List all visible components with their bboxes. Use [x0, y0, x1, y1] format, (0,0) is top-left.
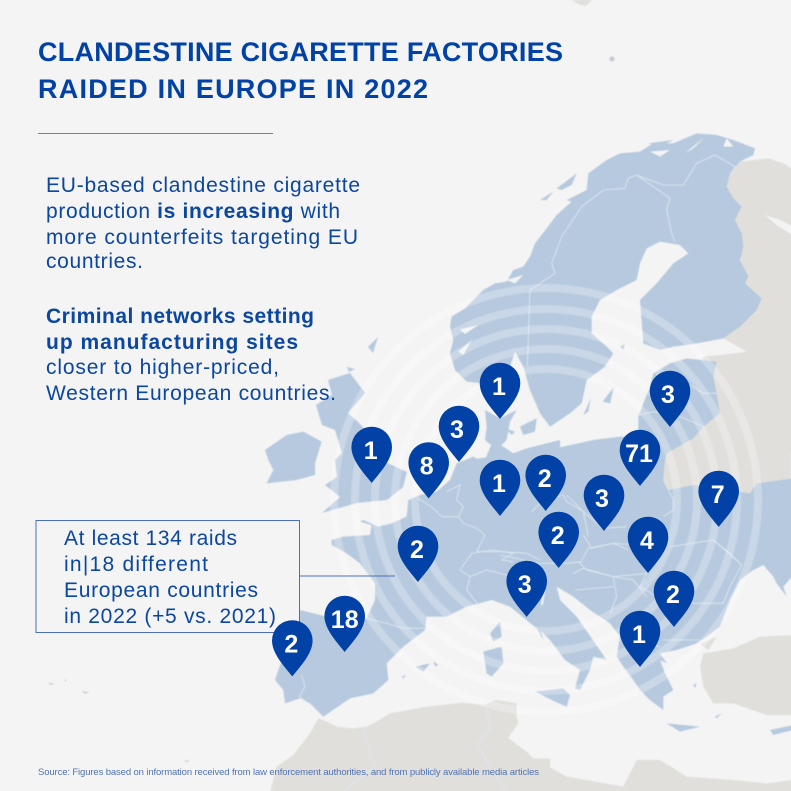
callout: total raids: in|18 different — [64, 553, 208, 576]
pin: Romania 4 — [628, 517, 668, 573]
pin: Bulgaria 2: 2 — [666, 581, 680, 609]
pin: Poland 71 — [620, 430, 660, 486]
pin: Greece 1 — [620, 611, 660, 667]
non-EU land: Morocco, Algeria, Tunisia — [270, 700, 550, 791]
text block: EU-based production — [46, 174, 360, 273]
Great Britain — [316, 373, 407, 513]
pin: Greece 1: 1 — [632, 621, 646, 649]
pin: Germany 1 — [480, 460, 520, 516]
map pins — [272, 363, 739, 676]
text block: EU-based production: production is increasing with — [46, 200, 340, 223]
non-EU land: Libya and Egypt — [493, 700, 791, 791]
Baltic states — [638, 358, 720, 453]
pin: Italy 3 — [506, 561, 547, 617]
text block: EU-based production: more counterfeits targeting EU — [46, 226, 358, 249]
pin: Netherlands 3 — [439, 406, 479, 462]
text block: EU-based production: EU-based clandestine cigarette — [46, 174, 360, 197]
pin: UK 1: 1 — [364, 437, 378, 465]
Scandinavia coast details — [458, 137, 733, 355]
Ireland — [265, 432, 322, 483]
pin: Ukraine 7 — [698, 471, 739, 527]
concentric rings — [334, 288, 758, 712]
pin: UK 1 — [351, 427, 392, 483]
northern isles — [347, 337, 378, 372]
pin: Portugal 2 — [272, 620, 313, 676]
pin: Ukraine 7: 7 — [711, 481, 725, 509]
pin: Bulgaria 2 — [654, 571, 694, 627]
pin: France 2 — [398, 526, 438, 582]
callout: total raids — [36, 520, 395, 632]
small island — [610, 56, 614, 62]
pin: Slovakia 3: 3 — [595, 485, 609, 513]
Africa borders — [343, 707, 507, 791]
non-EU land: Russia and Belarus — [640, 158, 791, 500]
source note: Source: Figures based on information received from law enforcement authorities, and from publicly available media articles — [38, 767, 539, 778]
text block: EU-based production: countries. — [46, 250, 143, 273]
pin: Netherlands 3: 3 — [450, 416, 464, 444]
callout: total raids: in 2022 (+5 vs. 2021) — [64, 605, 276, 628]
pin: Romania 4: 4 — [640, 527, 654, 555]
Atlantic islands — [48, 679, 189, 763]
pin: Belgium 8 — [408, 442, 449, 498]
title divider — [38, 133, 273, 134]
country borders — [299, 155, 742, 703]
Gulf of Finland — [660, 338, 747, 363]
pin: Estonia area 3 — [650, 371, 690, 427]
Scandinavia — [450, 133, 762, 427]
pin: Austria 2 — [538, 512, 579, 568]
text block: criminal networks: up manufacturing sites — [46, 331, 298, 354]
pin: Poland 71: 71 — [625, 440, 653, 468]
callout: total raids: European countries — [64, 579, 258, 602]
callout: total raids: At least 134 raids — [64, 527, 237, 550]
text block: criminal networks — [46, 305, 336, 405]
title — [38, 37, 563, 104]
text block: criminal networks: Criminal networks setting — [46, 305, 314, 328]
Western Europe — [275, 440, 560, 717]
non-EU land: Turkey — [700, 635, 791, 715]
text block: criminal networks: closer to higher-priced, — [46, 356, 279, 379]
pin: Denmark 1: 1 — [492, 373, 506, 401]
text block: criminal networks: Western European countries. — [46, 382, 336, 405]
title: RAIDED IN EUROPE IN 2022 — [38, 74, 428, 104]
title: CLANDESTINE CIGARETTE FACTORIES — [38, 37, 563, 67]
pin: France 2: 2 — [410, 536, 424, 564]
small land at top edge — [572, 0, 592, 6]
pin: Spain 18 — [324, 596, 365, 652]
pin: Estonia area 3: 3 — [661, 381, 675, 409]
pin: Germany 1: 1 — [492, 470, 506, 498]
Baltic islands and Denmark — [485, 343, 625, 450]
pin: Belgium 8: 8 — [420, 452, 434, 480]
pin: Portugal 2: 2 — [284, 630, 298, 658]
pin: Austria 2: 2 — [551, 522, 565, 550]
pin: Slovakia 3 — [584, 475, 624, 531]
pin: Denmark 1 — [480, 363, 520, 419]
pin: Czechia 2 — [525, 455, 566, 511]
pin: Spain 18: 18 — [331, 606, 359, 634]
pin: Italy 3: 3 — [518, 571, 532, 599]
Mediterranean islands — [402, 622, 791, 735]
Central and Eastern Europe — [467, 437, 791, 710]
pin: Czechia 2: 2 — [538, 465, 552, 493]
